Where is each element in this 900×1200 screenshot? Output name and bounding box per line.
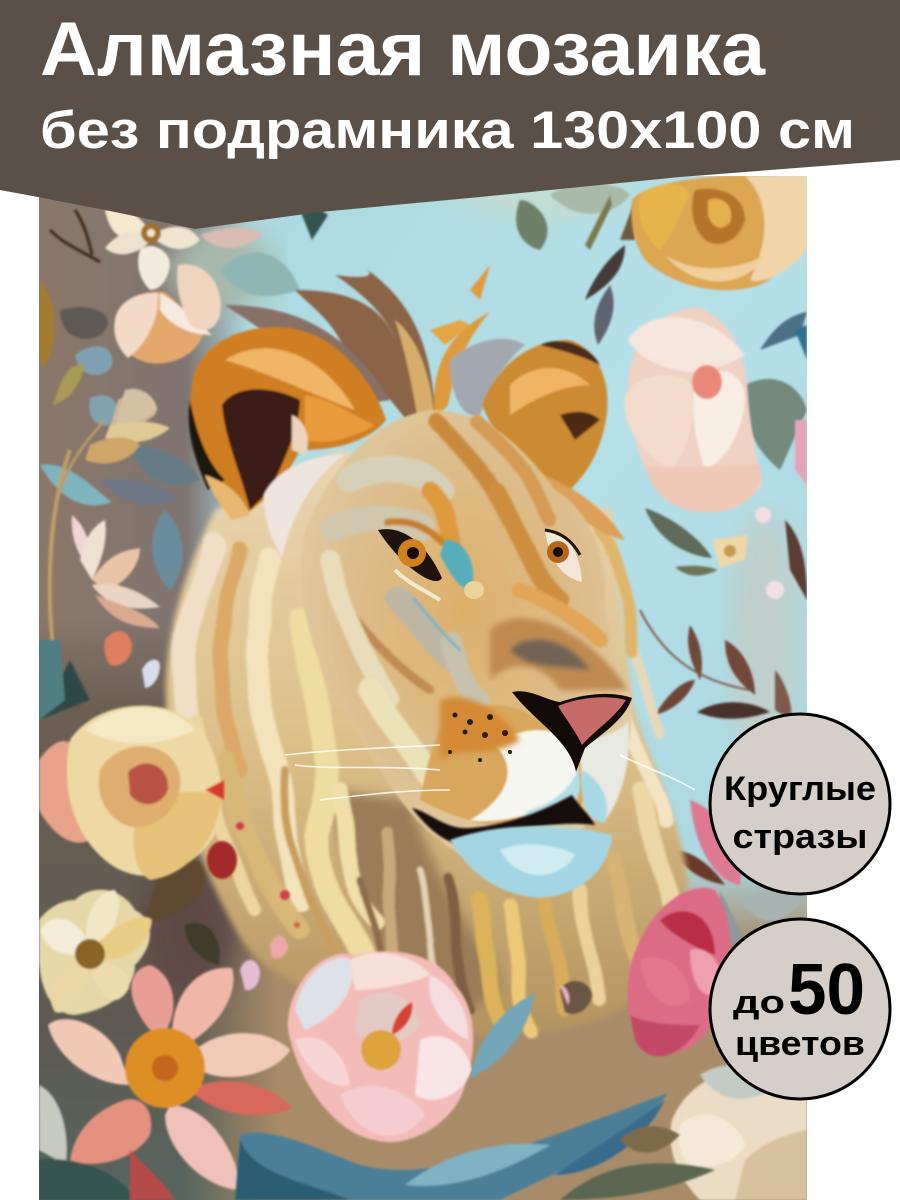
flower: pale pink lotus, left [72, 515, 160, 688]
flower: small cream star, right [712, 507, 784, 599]
lion face [285, 410, 695, 898]
lion mane [166, 450, 688, 1036]
forehead markings [330, 420, 600, 790]
badge: up to 50 colours: 50 [788, 950, 865, 1030]
badge: up to 50 colours: цветов [735, 1025, 865, 1063]
flower: pale buds, left [85, 389, 170, 464]
right eye [545, 530, 582, 582]
title: Алмазная мозаика [40, 7, 766, 92]
header banner [0, 0, 900, 229]
chin [450, 826, 612, 898]
badge: up to 50 colours [710, 919, 890, 1099]
whiskers [285, 745, 695, 800]
lion top tuft [225, 268, 525, 425]
background: dark muted tones left, warm tones below [39, 170, 807, 1200]
flower buds, centre left [240, 936, 592, 1014]
flower: pale pink, right [624, 308, 807, 512]
flower: white daisy, bottom left [39, 890, 152, 1015]
flower: yellow rose, left [39, 706, 300, 928]
badge: up to 50 colours: до [733, 984, 785, 1020]
painting: lion among flowers [39, 170, 807, 1200]
blue leaves, bottom [235, 993, 715, 1200]
flower: pink peony, bottom centre [288, 951, 473, 1142]
flower: white rose, bottom right [670, 1065, 807, 1200]
mouth [412, 795, 595, 845]
muzzle [420, 706, 586, 826]
subtitle: без подрамника 130х100 см [40, 101, 855, 160]
darker hair between light locks [330, 790, 498, 1006]
blue nose-bridge highlight [440, 540, 473, 590]
flower: white lily, top left [105, 209, 262, 290]
flower: big pink with orange centre, bottom left [39, 965, 293, 1200]
brow bump [464, 581, 484, 599]
flower: pink rose, right [627, 888, 731, 1056]
nose [512, 691, 632, 772]
badge: round rhinestones [710, 714, 890, 894]
lion right ear [482, 340, 625, 540]
foliage leaves [39, 184, 807, 965]
flower: orange rose, top right [631, 175, 807, 290]
lion left ear [189, 327, 386, 558]
snout bridge [490, 618, 628, 690]
flower: peach tulip, top left [114, 264, 221, 363]
badge: round rhinestones: Круглые [724, 770, 876, 808]
left eye [378, 529, 442, 600]
muzzle spots [448, 712, 512, 762]
badge: round rhinestones: стразы [732, 818, 868, 856]
